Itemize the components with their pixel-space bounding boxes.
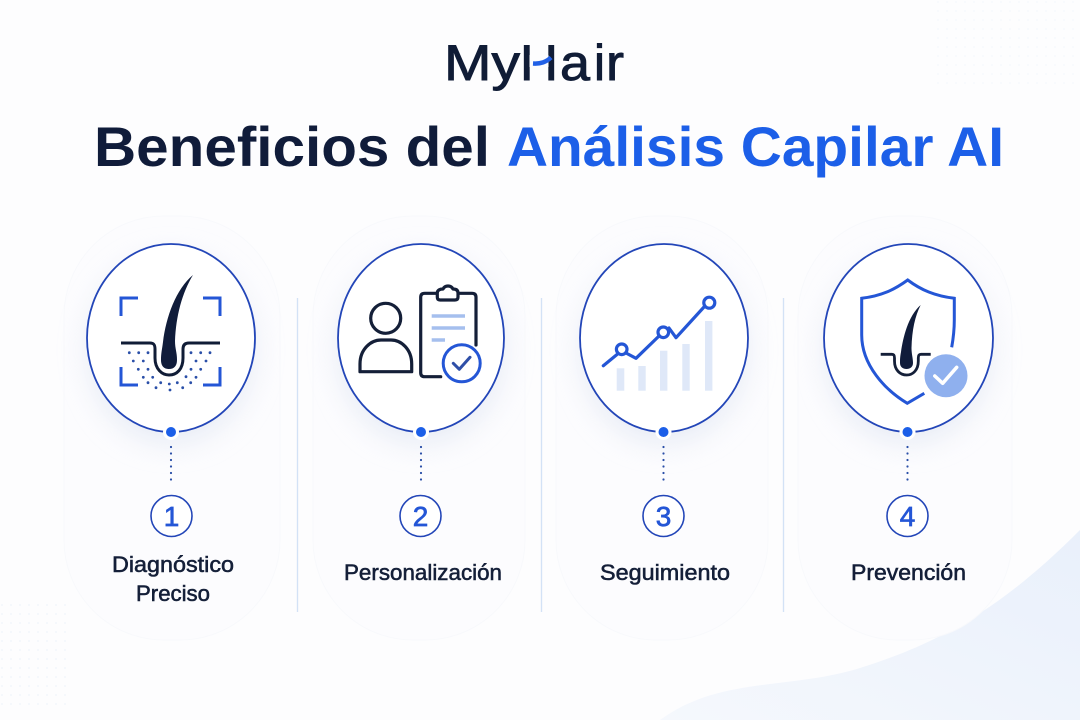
label 3: Seguimiento xyxy=(600,560,730,585)
icon: shield with hair xyxy=(862,280,968,403)
logo xyxy=(444,35,624,91)
icon: hair follicle scan xyxy=(121,275,220,391)
icon: person and clipboard xyxy=(360,286,480,382)
title xyxy=(94,115,1004,178)
connector dot 4 xyxy=(900,424,916,481)
panel: background cards xyxy=(64,216,1012,640)
logo: r xyxy=(606,35,624,91)
icon: growth chart xyxy=(603,297,715,391)
label 4: Prevención xyxy=(851,560,966,585)
number 3 xyxy=(643,496,684,536)
label 1: Preciso xyxy=(136,581,210,606)
panel: step 1 xyxy=(87,244,255,606)
panel: step 3 xyxy=(580,244,748,585)
circle shadows xyxy=(87,256,992,444)
circle 4 xyxy=(824,244,993,432)
background wave xyxy=(660,530,1080,720)
title: Beneficios del xyxy=(94,115,490,178)
logo: My xyxy=(444,35,520,91)
number 4: 4 xyxy=(900,501,915,532)
connector dot 3 xyxy=(656,424,672,481)
circle 2 xyxy=(338,244,504,432)
title: Análisis Capilar AI xyxy=(507,115,1004,178)
number 1: 1 xyxy=(164,501,179,532)
circle 3 xyxy=(580,244,748,432)
circle 1 xyxy=(87,244,255,432)
number 4 xyxy=(887,496,928,536)
connector dot 2 xyxy=(413,424,429,481)
number 3: 3 xyxy=(656,501,671,532)
panel: step 2 xyxy=(338,244,504,585)
logo: i xyxy=(594,35,605,91)
logo: a xyxy=(560,35,590,91)
label 1 xyxy=(112,552,234,606)
number 1 xyxy=(151,496,192,536)
label 1: Diagnóstico xyxy=(112,552,234,577)
panel: step 4 xyxy=(824,244,993,585)
label 2: Personalización xyxy=(344,560,502,585)
logo: H xyxy=(520,35,558,91)
connector dot 1 xyxy=(163,424,179,481)
dividers xyxy=(298,298,784,612)
number 2 xyxy=(400,496,441,536)
number 2: 2 xyxy=(413,501,428,532)
